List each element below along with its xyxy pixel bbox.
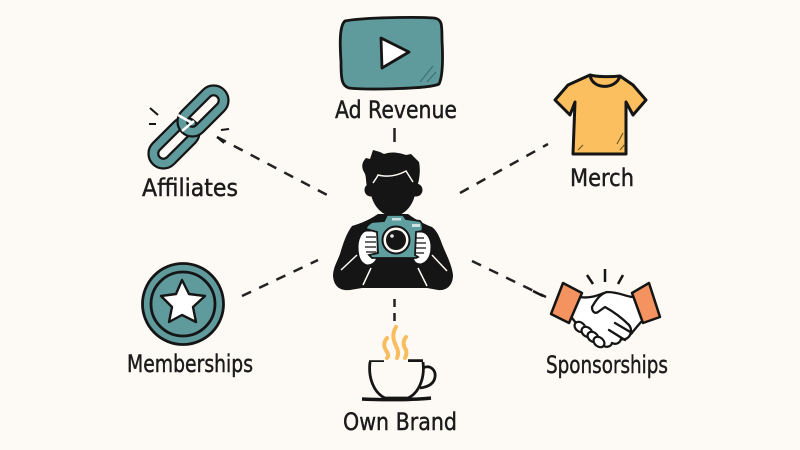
icon: coffee cup with steam xyxy=(362,327,435,400)
node: Merch xyxy=(555,75,646,192)
viewfinder xyxy=(392,218,401,220)
central creator with camera xyxy=(333,150,453,290)
icon: star medal xyxy=(142,264,224,344)
label: Sponsorships: Sponsorships xyxy=(546,351,668,379)
creator head and hair xyxy=(362,150,422,216)
label: Ad Revenue: Ad Revenue xyxy=(335,96,457,124)
connector: to Ad Revenue xyxy=(393,128,396,142)
lens glint xyxy=(390,234,394,238)
connector: to Merch xyxy=(460,144,548,193)
node: Memberships xyxy=(127,264,253,378)
left hand xyxy=(358,231,378,265)
arm highlights xyxy=(341,255,447,286)
node: Sponsorships xyxy=(533,269,668,379)
icon: handshake xyxy=(533,269,660,349)
label: Memberships: Memberships xyxy=(127,350,253,378)
camera body xyxy=(366,215,423,258)
left cuff xyxy=(551,283,582,323)
camera lens xyxy=(382,226,410,254)
flash xyxy=(412,224,420,227)
icon: t-shirt xyxy=(555,75,646,154)
node: Ad Revenue xyxy=(335,17,457,124)
icon: chain link xyxy=(149,86,229,168)
upper link xyxy=(178,86,228,136)
label: Merch: Merch xyxy=(570,164,634,192)
label: Affiliates: Affiliates xyxy=(142,174,238,202)
camera lens glass xyxy=(386,230,406,250)
connector: to Affiliates xyxy=(217,137,329,196)
right cuff xyxy=(632,283,660,323)
hairline highlight xyxy=(373,171,413,183)
connector: to Own Brand xyxy=(393,299,396,321)
hands fill xyxy=(575,292,641,347)
node: Own Brand xyxy=(343,327,457,436)
connector: to Memberships xyxy=(242,260,318,296)
hands outline xyxy=(572,292,641,347)
icon: video play button xyxy=(340,17,443,89)
finger lines xyxy=(365,237,426,253)
lower link xyxy=(149,118,199,168)
right hand xyxy=(412,232,431,264)
connector: to Sponsorships xyxy=(472,261,546,297)
node: Affiliates xyxy=(142,86,238,202)
creator body xyxy=(333,214,453,290)
label: Own Brand: Own Brand xyxy=(343,408,457,436)
knuckles xyxy=(573,320,606,349)
